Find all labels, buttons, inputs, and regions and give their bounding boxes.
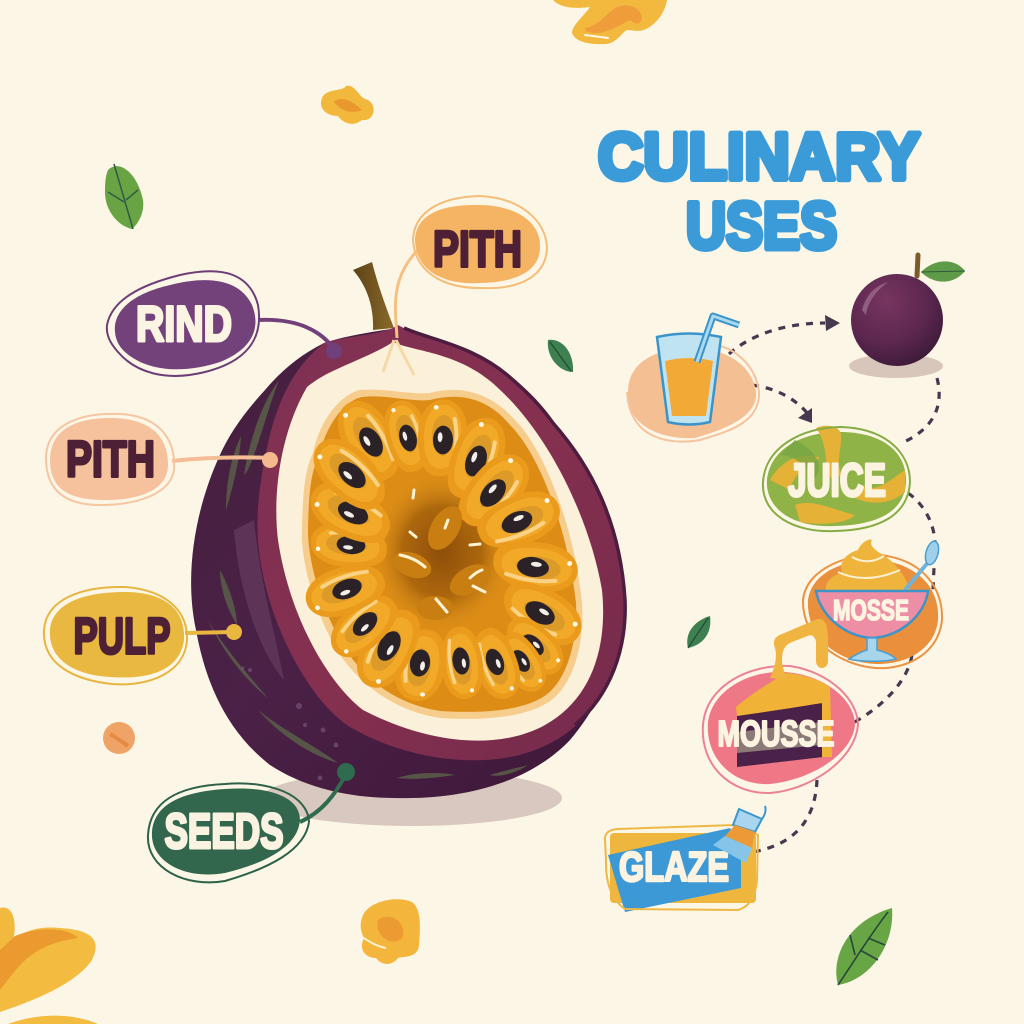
left pith connector	[172, 457, 270, 461]
top pith connector	[395, 250, 418, 338]
mosse illustration	[803, 540, 942, 668]
seeds label	[148, 763, 355, 882]
top pith label	[383, 196, 547, 375]
dark rind edge	[404, 328, 625, 725]
mousse text: MOUSSE	[718, 713, 834, 754]
path: juice to mosse	[908, 493, 935, 590]
pulp text: PULP	[74, 608, 170, 664]
decoration: bottom left flower	[0, 908, 98, 1024]
top pith outline	[413, 196, 547, 288]
path: mousse to glaze	[753, 780, 817, 852]
brush bristles	[713, 836, 752, 863]
mousse illustration	[703, 619, 858, 793]
fruit leaf	[921, 261, 965, 282]
pulp highlights	[400, 490, 485, 612]
bowl stem and foot	[849, 638, 896, 661]
spoon	[905, 560, 930, 590]
glaze text: GLAZE	[619, 843, 729, 890]
decoration: popcorn blossom	[361, 899, 420, 964]
decoration: lower right leaf	[836, 908, 892, 985]
brush handle	[733, 809, 762, 832]
seeds text: SEEDS	[164, 805, 284, 859]
fruit shine	[862, 282, 888, 315]
seeds badge	[152, 788, 300, 875]
decoration: top flower	[553, 0, 667, 44]
inner pulp sacs	[389, 500, 496, 620]
decoration: small yellow blossom	[321, 86, 374, 124]
peach blob	[628, 348, 756, 438]
pulp outline	[44, 587, 187, 684]
mosse swirl lines	[838, 556, 900, 578]
cake dark layers	[737, 703, 823, 767]
rind label	[107, 271, 342, 376]
title	[598, 119, 920, 262]
pulp badge	[50, 592, 184, 678]
top pith text: PITH	[433, 220, 522, 278]
pulp label	[44, 587, 242, 684]
juice badge	[763, 426, 910, 531]
rind light patch	[234, 520, 284, 680]
cake cream band	[737, 722, 822, 753]
rind outline	[107, 271, 259, 376]
left pith badge	[50, 418, 168, 500]
pith fork	[383, 340, 414, 375]
left pith label	[46, 414, 278, 505]
rind streaks	[208, 380, 528, 779]
glaze blue swatch	[608, 828, 741, 912]
mosse text: MOSSE	[833, 595, 909, 627]
fruit body	[851, 274, 943, 366]
seeds connector	[300, 774, 346, 822]
dashed flow arrows	[729, 323, 939, 852]
stem	[353, 262, 394, 330]
fruit shadow	[849, 354, 943, 378]
pulp dot	[226, 624, 242, 640]
juice yellow swirls	[770, 426, 905, 524]
pulp rim	[302, 390, 582, 719]
arrowhead: fruit	[825, 315, 840, 331]
straw	[697, 316, 739, 362]
spoon bowl	[923, 540, 941, 566]
pulp	[308, 396, 576, 712]
rind connector	[258, 320, 335, 350]
left pith dot	[262, 452, 278, 468]
left pith outline	[46, 414, 174, 505]
brush ferrule	[725, 825, 755, 848]
mousse outline	[703, 666, 858, 793]
rind badge	[115, 280, 255, 369]
juice outline	[763, 427, 910, 531]
glaze pour	[770, 619, 828, 680]
path: mosse to mousse	[853, 655, 912, 723]
seeds outline	[148, 783, 309, 882]
glaze mustard panel	[610, 833, 756, 903]
path: fruit to juice	[902, 378, 939, 443]
arrow: glass to fruit	[729, 323, 825, 354]
brush tail	[762, 806, 766, 819]
glaze illustration	[605, 806, 766, 912]
rind pointer dot	[326, 343, 342, 359]
decoration: leaf near fruit	[548, 340, 573, 372]
cake glaze top	[736, 673, 832, 757]
fruit stem	[917, 255, 918, 276]
seeds dot	[337, 763, 355, 781]
glass	[657, 334, 721, 424]
juice glass illustration	[627, 316, 759, 442]
mosse outline	[803, 555, 942, 668]
top pith badge	[415, 205, 540, 283]
peach outline	[627, 346, 759, 442]
glaze outline	[605, 825, 758, 910]
passion fruit cross-section	[191, 262, 625, 798]
arrowhead: juice	[798, 408, 812, 423]
pulp sacs and seeds	[299, 391, 592, 705]
pulp connector	[185, 632, 234, 633]
fruit shadow	[262, 770, 562, 826]
title line one: CULINARY	[598, 119, 920, 193]
decoration: orange dot	[103, 722, 135, 754]
bowl	[816, 591, 928, 638]
straw highlight	[697, 316, 739, 362]
pith	[276, 342, 603, 741]
pulp centre	[370, 470, 514, 634]
rind text: RIND	[136, 296, 232, 352]
orange juice	[665, 358, 713, 416]
mosse orange blob	[808, 560, 938, 664]
juice green blob	[767, 432, 906, 526]
juice darker swirl	[780, 440, 819, 478]
rind speckles	[242, 666, 338, 780]
whole passion fruit	[849, 255, 965, 378]
title line two: USES	[686, 188, 837, 262]
mousse pink blob	[708, 672, 855, 784]
mosse swirl	[826, 540, 910, 592]
rind outer body	[191, 328, 625, 798]
left pith text: PITH	[66, 430, 155, 488]
decoration: green leaf upper left	[105, 164, 143, 229]
decoration: lower small leaf	[687, 616, 710, 648]
juice text: JUICE	[788, 454, 886, 506]
rind cut ring	[257, 325, 625, 760]
arrow: glass to juice	[752, 385, 808, 414]
